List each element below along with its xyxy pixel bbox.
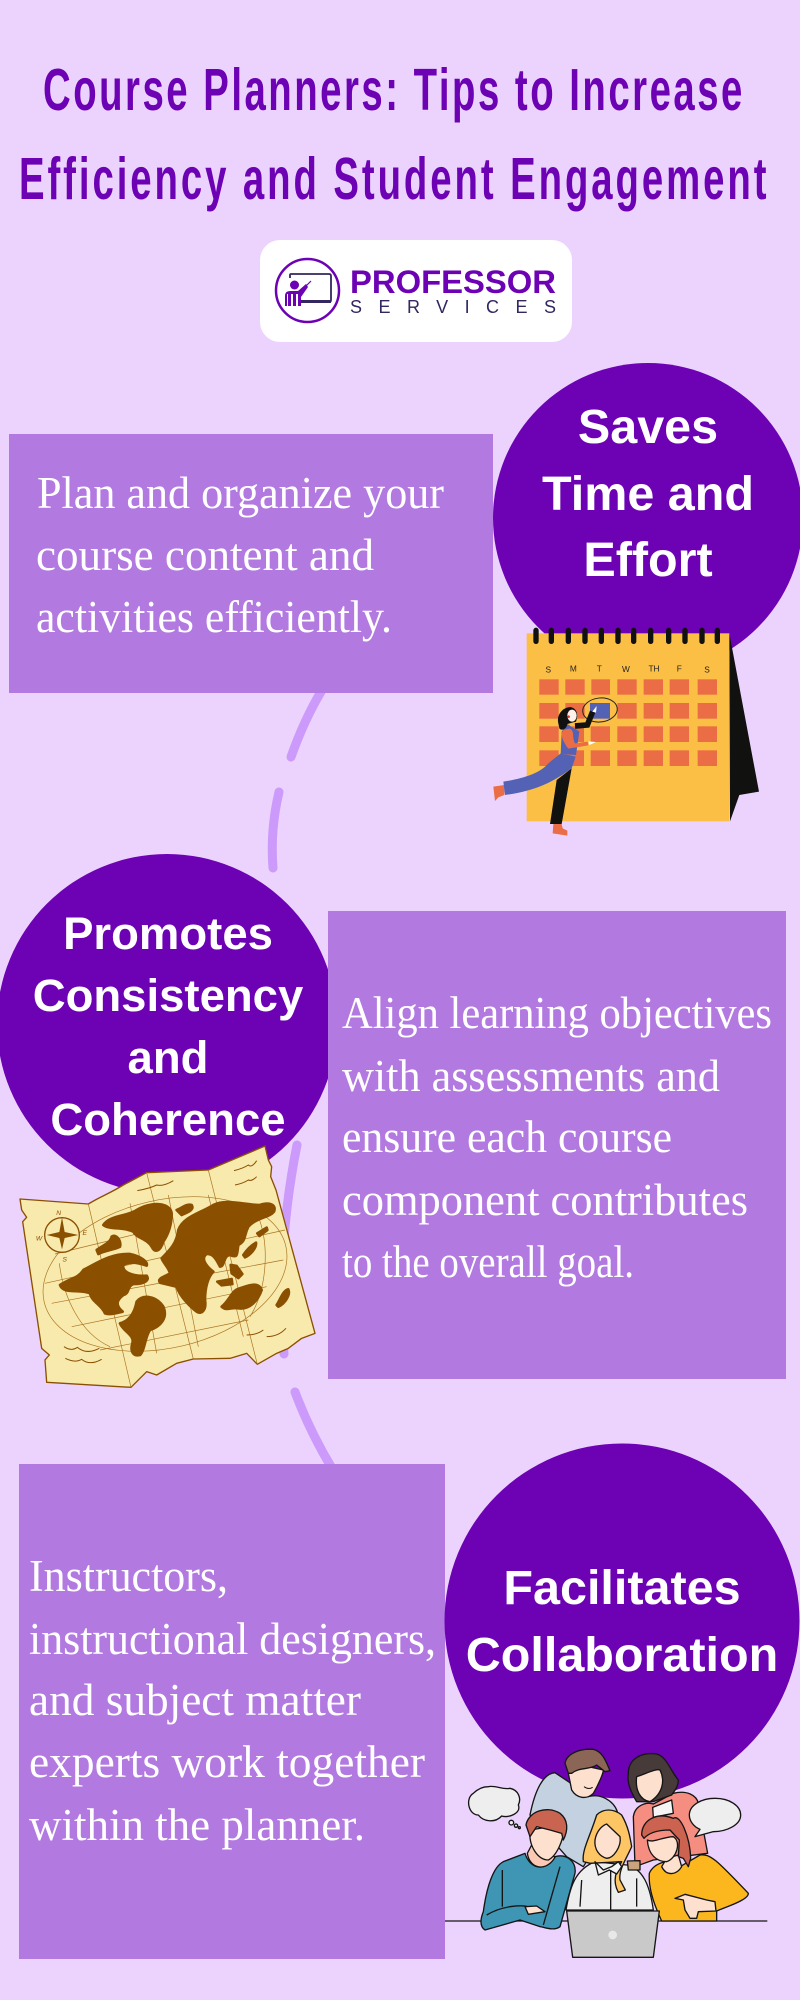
circle heading: Saves Time and Effort: Saves [578,400,718,454]
title: Course Planners: Tips to Increase [43,57,742,123]
panel: collaboration text: and subject matter [29,1675,361,1725]
icon: calendar with woman: TH [648,664,660,674]
circle heading: Facilitates Collaboration: Facilitates [503,1561,741,1615]
icon: treasure map: N [56,1210,61,1217]
dashed connector curve [272,690,333,1470]
circle heading: Saves Time and Effort: Effort [583,533,713,587]
panel: saves time text: course content and [36,530,374,580]
icon: treasure map: S [62,1257,67,1264]
circle heading: Saves Time and Effort: Time and [542,467,754,521]
icon: calendar with woman: T [597,663,602,673]
icon: calendar with woman: W [622,664,630,674]
title [19,57,767,212]
panel: consistency text: ensure each course [342,1112,672,1162]
logo: Professor Services [260,240,572,342]
panel: collaboration text: Instructors, [29,1551,228,1601]
title: Efficiency and Student Engagement [19,146,767,212]
circle heading: Promotes Consistency and Coherence [0,854,337,1194]
icon: calendar with woman: M [570,663,577,673]
icon: treasure map: E [82,1230,87,1237]
icon: treasure map: W [36,1236,43,1243]
icon: calendar with woman [493,628,759,836]
panel: saves time text: activities efficiently. [36,592,392,642]
panel: consistency text: component contributes [342,1175,748,1225]
logo: Professor Services: PROFESSOR [350,264,556,300]
panel: saves time text: Plan and organize your [37,468,444,518]
icon: calendar with woman: S [546,665,552,675]
panel: saves time text [9,434,493,693]
circle heading: Facilitates Collaboration: Collaboration [466,1628,778,1682]
circle heading: Saves Time and Effort [493,363,800,673]
panel: consistency text: Align learning objectives [342,988,772,1038]
icon: calendar with woman: S [704,665,710,675]
panel: collaboration text: experts work together [29,1737,425,1787]
circle heading: Facilitates Collaboration [444,1444,800,1798]
circle heading: Promotes Consistency and Coherence: Coherence [50,1094,286,1145]
icon: team around laptop [445,1749,767,1957]
circle heading: Promotes Consistency and Coherence: and [128,1032,208,1083]
icon: calendar with woman: F [677,663,682,673]
panel: collaboration text: within the planner. [29,1800,365,1850]
panel: consistency text: with assessments and [342,1051,720,1101]
logo: Professor Services: SERVICES [350,297,556,317]
panel: collaboration text [19,1464,445,1959]
circle heading: Promotes Consistency and Coherence: Promotes [63,908,273,959]
panel: collaboration text: instructional designers, [29,1614,436,1664]
panel: consistency text: to the overall goal. [342,1237,634,1287]
panel: consistency text [328,911,786,1379]
icon: treasure map [20,1146,315,1387]
circle heading: Promotes Consistency and Coherence: Consistency [33,970,304,1021]
